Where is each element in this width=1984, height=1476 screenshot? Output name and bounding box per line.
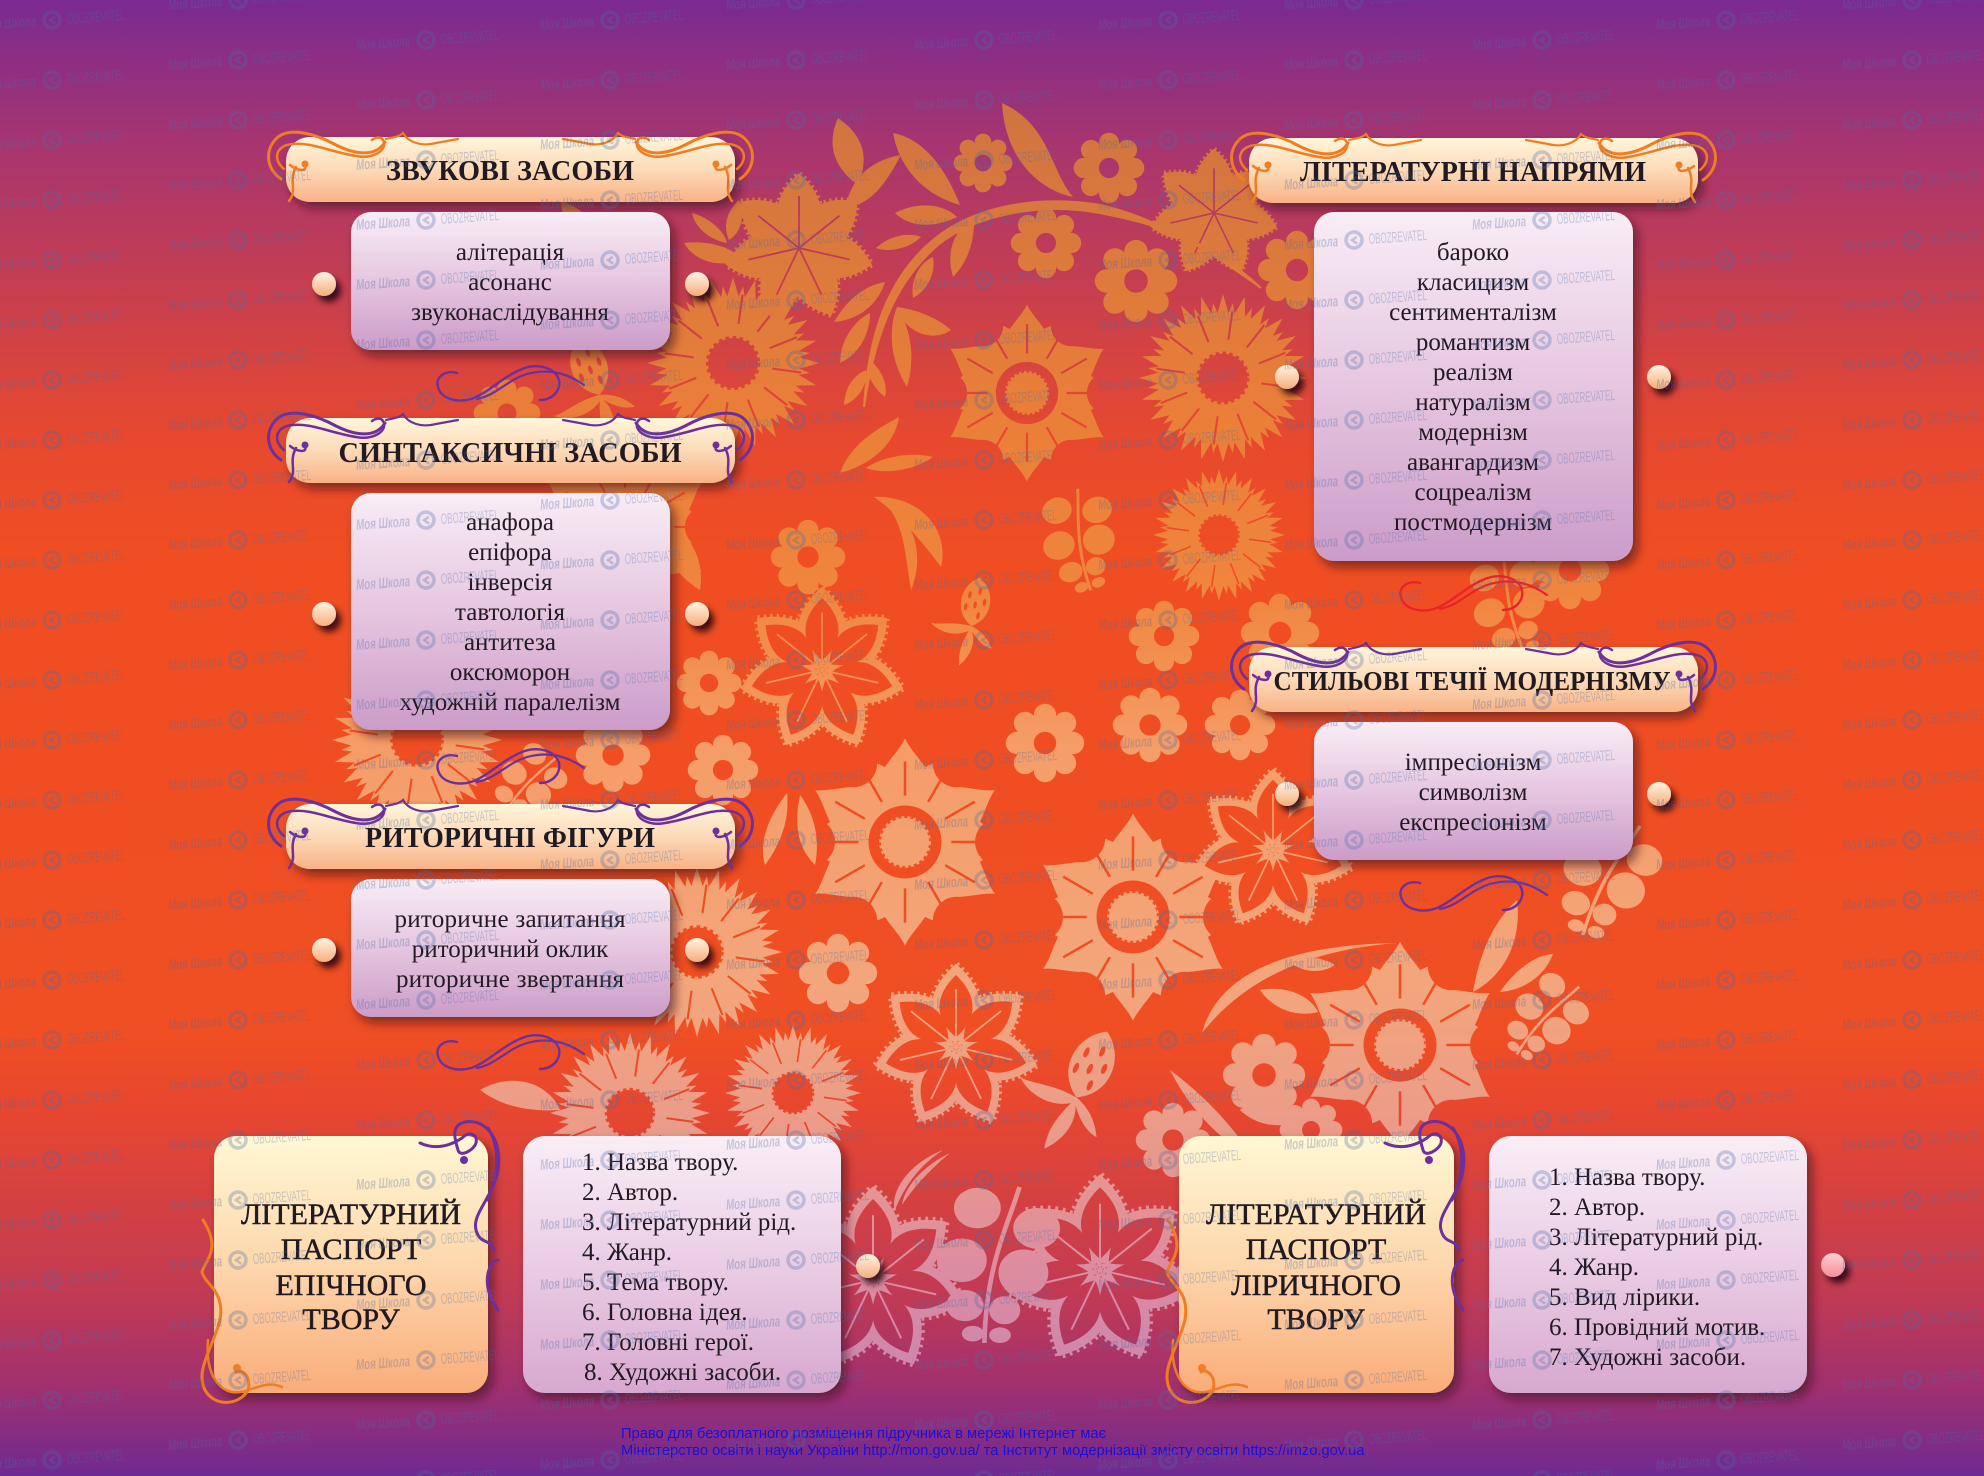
title card: lyric passport: ПАСПОРТ: [1246, 1233, 1386, 1266]
bullet left: [312, 602, 336, 626]
heading: rhetorical figures: [269, 799, 752, 869]
list card: epic passport: 6. Головна ідея.: [582, 1299, 747, 1326]
title card: epic passport: ТВОРУ: [302, 1303, 400, 1336]
title card: lyric passport: ТВОРУ: [1267, 1303, 1365, 1336]
panel: sound devices: [269, 132, 752, 350]
list card: literary movements: бароко: [1437, 239, 1509, 266]
list card: syntactic devices: анафора: [466, 509, 554, 536]
list card: syntactic devices: антитеза: [464, 629, 556, 656]
swirl divider 1: [437, 366, 584, 400]
list card: epic passport: 1. Назва твору.: [582, 1149, 738, 1176]
bullet pink: [1821, 1253, 1845, 1277]
swirl divider 3: [437, 1035, 584, 1070]
heading: modernism trends: СТИЛЬОВІ ТЕЧІЇ МОДЕРНІЗМУ: [1274, 666, 1671, 696]
swirl divider red: [1400, 576, 1547, 610]
list card: epic passport: [523, 1136, 841, 1393]
list card: epic passport: 3. Літературний рід.: [582, 1209, 796, 1236]
panel: rhetorical figures: [269, 799, 752, 1017]
title card: lyric passport: [1167, 1122, 1464, 1402]
list card: sound devices: асонанс: [468, 269, 552, 296]
footer note: [621, 1426, 1365, 1459]
list card: rhetorical figures: риторичне запитання: [394, 906, 626, 933]
heading: sound devices: [269, 132, 752, 202]
list card: literary movements: реалізм: [1433, 359, 1513, 386]
floral background pattern: [332, 103, 1662, 1367]
list card: lyric passport: 7. Художні засоби.: [1549, 1344, 1746, 1371]
panel: epic work passport: [202, 1122, 880, 1402]
list card: rhetorical figures: риторичний оклик: [412, 936, 609, 963]
list card: syntactic devices: інверсія: [467, 569, 553, 596]
footer note: Право для безоплатного розміщення підручника в мережі Інтернет має: [621, 1426, 1107, 1442]
bullet right: [1647, 365, 1671, 389]
list card: literary movements: постмодернізм: [1394, 509, 1552, 536]
list card: lyric passport: 3. Літературний рід.: [1549, 1224, 1763, 1251]
heading: syntactic devices: [269, 413, 752, 483]
footer note: Міністерство освіти і науки України http://mon.gov.ua/ та Інститут модернізації змісту освіти https://imzo.gov.ua: [621, 1443, 1365, 1459]
list card: lyric passport: 5. Вид лірики.: [1549, 1284, 1700, 1311]
list card: epic passport: 2. Автор.: [582, 1179, 678, 1206]
bullet left: [312, 938, 336, 962]
list card: syntactic devices: тавтологія: [455, 599, 565, 626]
list card: syntactic devices: оксюморон: [450, 659, 570, 686]
title card: lyric passport: ЛІТЕРАТУРНИЙ: [1206, 1198, 1426, 1231]
list card: syntactic devices: [351, 493, 670, 730]
list card: epic passport: 5. Тема твору.: [582, 1269, 729, 1296]
title card: epic passport: ЕПІЧНОГО: [275, 1269, 427, 1302]
title card: epic passport: ЛІТЕРАТУРНИЙ: [241, 1198, 461, 1231]
title card: lyric passport: ЛІРИЧНОГО: [1231, 1269, 1401, 1302]
list card: literary movements: сентименталізм: [1389, 299, 1557, 326]
list card: lyric passport: [1489, 1136, 1807, 1393]
list card: rhetorical figures: риторичне звертання: [396, 966, 624, 993]
list card: modernism trends: символізм: [1419, 779, 1528, 806]
list card: sound devices: алітерація: [456, 239, 565, 266]
heading: sound devices: ЗВУКОВІ ЗАСОБИ: [386, 155, 634, 187]
title card: epic passport: ПАСПОРТ: [281, 1233, 421, 1266]
bullet right: [685, 602, 709, 626]
bullet left: [1275, 782, 1299, 806]
list card: epic passport: 4. Жанр.: [582, 1239, 672, 1266]
list card: lyric passport: 1. Назва твору.: [1549, 1164, 1705, 1191]
list card: literary movements: авангардизм: [1407, 449, 1539, 476]
heading: literary movements: ЛІТЕРАТУРНІ НАПРЯМИ: [1300, 156, 1646, 188]
list card: epic passport: 7. Головні герої.: [582, 1329, 754, 1356]
heading: modernism trends: [1232, 642, 1715, 712]
bullet right: [1647, 782, 1671, 806]
list card: modernism trends: експресіонізм: [1399, 809, 1547, 836]
panel: literary movements: [1232, 133, 1715, 561]
swirl divider 5: [1400, 876, 1547, 910]
list card: literary movements: романтизм: [1416, 329, 1530, 356]
bullet left: [312, 272, 336, 296]
title card: epic passport: [202, 1122, 499, 1402]
panel: syntactic devices: [269, 413, 752, 730]
heading: literary movements: [1232, 133, 1715, 203]
list card: literary movements: модернізм: [1418, 419, 1528, 446]
list card: syntactic devices: художній паралелізм: [400, 689, 621, 716]
list card: lyric passport: 4. Жанр.: [1549, 1254, 1639, 1281]
heading: rhetorical figures: РИТОРИЧНІ ФІГУРИ: [365, 822, 655, 854]
heading: syntactic devices: СИНТАКСИЧНІ ЗАСОБИ: [338, 437, 682, 469]
list card: literary movements: класицизм: [1417, 269, 1529, 296]
list card: modernism trends: [1314, 722, 1633, 860]
bullet: [856, 1254, 880, 1278]
bullet left: [1275, 365, 1299, 389]
panel: lyric work passport: [1167, 1122, 1845, 1402]
list card: syntactic devices: епіфора: [468, 539, 552, 566]
swirl divider 2: [437, 749, 584, 784]
list card: literary movements: соцреалізм: [1415, 479, 1532, 506]
list card: lyric passport: 6. Провідний мотив.: [1549, 1314, 1765, 1341]
panel: modernism trends: [1232, 642, 1715, 860]
list card: epic passport: 8. Художні засоби.: [584, 1359, 781, 1386]
list card: sound devices: звуконаслідування: [411, 299, 609, 326]
list card: lyric passport: 2. Автор.: [1549, 1194, 1645, 1221]
list card: literary movements: [1314, 212, 1633, 561]
list card: modernism trends: імпресіонізм: [1405, 749, 1541, 776]
list card: rhetorical figures: [351, 879, 670, 1017]
bullet right: [685, 938, 709, 962]
list card: sound devices: [351, 212, 670, 350]
list card: literary movements: натуралізм: [1415, 389, 1531, 416]
bullet right: [685, 272, 709, 296]
